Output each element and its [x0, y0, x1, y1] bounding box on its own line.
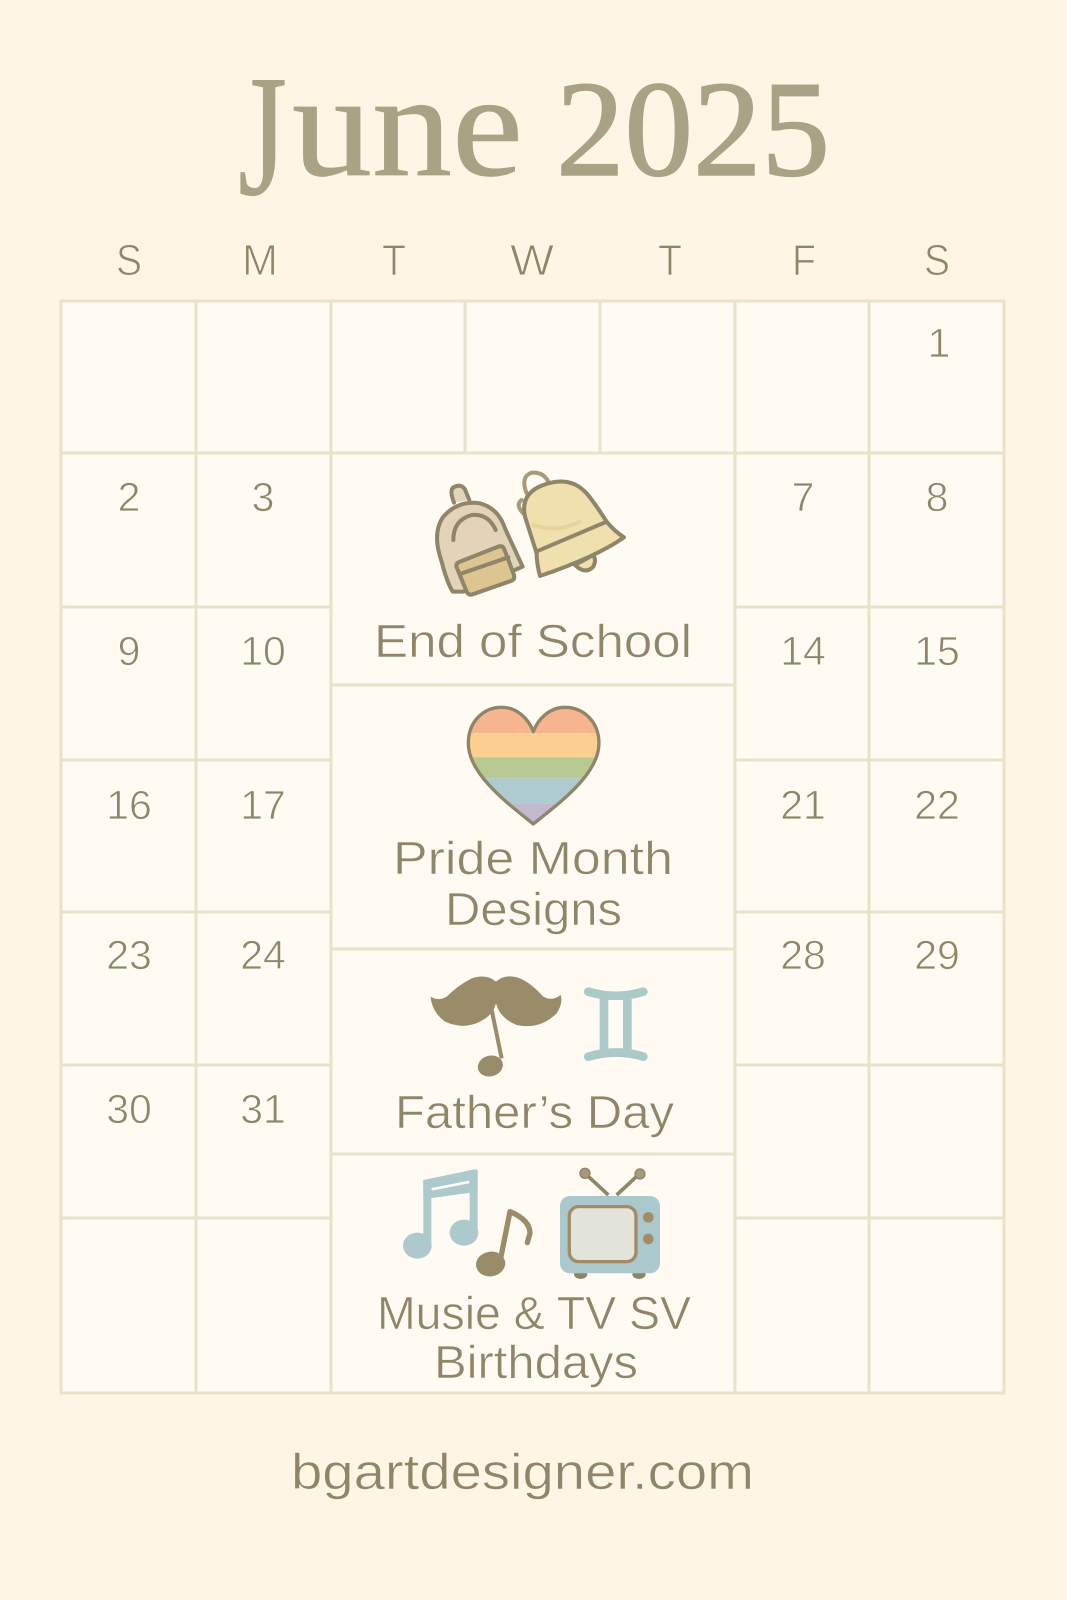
label: Pride Month Designs: [393, 832, 673, 935]
icon: rainbow heart: [463, 703, 603, 827]
date numbers: 9: [118, 628, 140, 674]
title: J: [238, 39, 287, 232]
date numbers: 2: [118, 474, 140, 520]
date numbers: [106, 320, 960, 1132]
date numbers: 7: [792, 474, 814, 520]
label: Musie & TV SV Birthdays: Birthdays: [434, 1336, 638, 1388]
weekday header: M: [242, 236, 278, 285]
weekday header: T: [658, 236, 682, 285]
date numbers: 24: [240, 932, 286, 978]
date numbers: 28: [780, 932, 826, 978]
icon: mustache with note: [431, 976, 561, 1079]
icon: beamed music notes: [403, 1169, 478, 1259]
icon: brown music note: [474, 1212, 530, 1279]
label: Musie & TV SV Birthdays: [377, 1287, 691, 1388]
label: Musie & TV SV Birthdays: Musie & TV SV: [377, 1287, 691, 1339]
date numbers: 23: [106, 932, 152, 978]
label: Pride Month Designs: Pride Month: [393, 832, 673, 884]
icon: television: [560, 1168, 660, 1279]
date numbers: 31: [240, 1086, 286, 1132]
date numbers: 15: [914, 628, 960, 674]
calendar grid: [61, 301, 1004, 1393]
date numbers: 16: [106, 782, 152, 828]
date numbers: 10: [240, 628, 286, 674]
label: End of School: End of School: [374, 615, 692, 667]
title: [238, 39, 830, 232]
title: une: [292, 44, 523, 208]
title: 2025: [556, 53, 830, 205]
icon: backpack: [437, 486, 523, 595]
icon: bell: [519, 473, 624, 576]
date numbers: 1: [928, 320, 950, 366]
footer website: bgartdesigner.com: [291, 1444, 754, 1500]
weekday header: T: [382, 236, 406, 285]
date numbers: 22: [914, 782, 960, 828]
label: Pride Month Designs: Designs: [445, 883, 622, 935]
icon: gemini symbol: [588, 992, 643, 1057]
weekday header: S: [924, 236, 950, 285]
date numbers: 3: [252, 474, 274, 520]
weekday header: [116, 236, 950, 285]
weekday header: S: [116, 236, 142, 285]
date numbers: 30: [106, 1086, 152, 1132]
label: Father's Day: Father’s Day: [395, 1086, 674, 1138]
date numbers: 29: [914, 932, 960, 978]
date numbers: 14: [780, 628, 826, 674]
date numbers: 17: [240, 782, 286, 828]
date numbers: 21: [780, 782, 826, 828]
weekday header: W: [510, 236, 554, 285]
date numbers: 8: [926, 474, 948, 520]
weekday header: F: [792, 236, 816, 285]
